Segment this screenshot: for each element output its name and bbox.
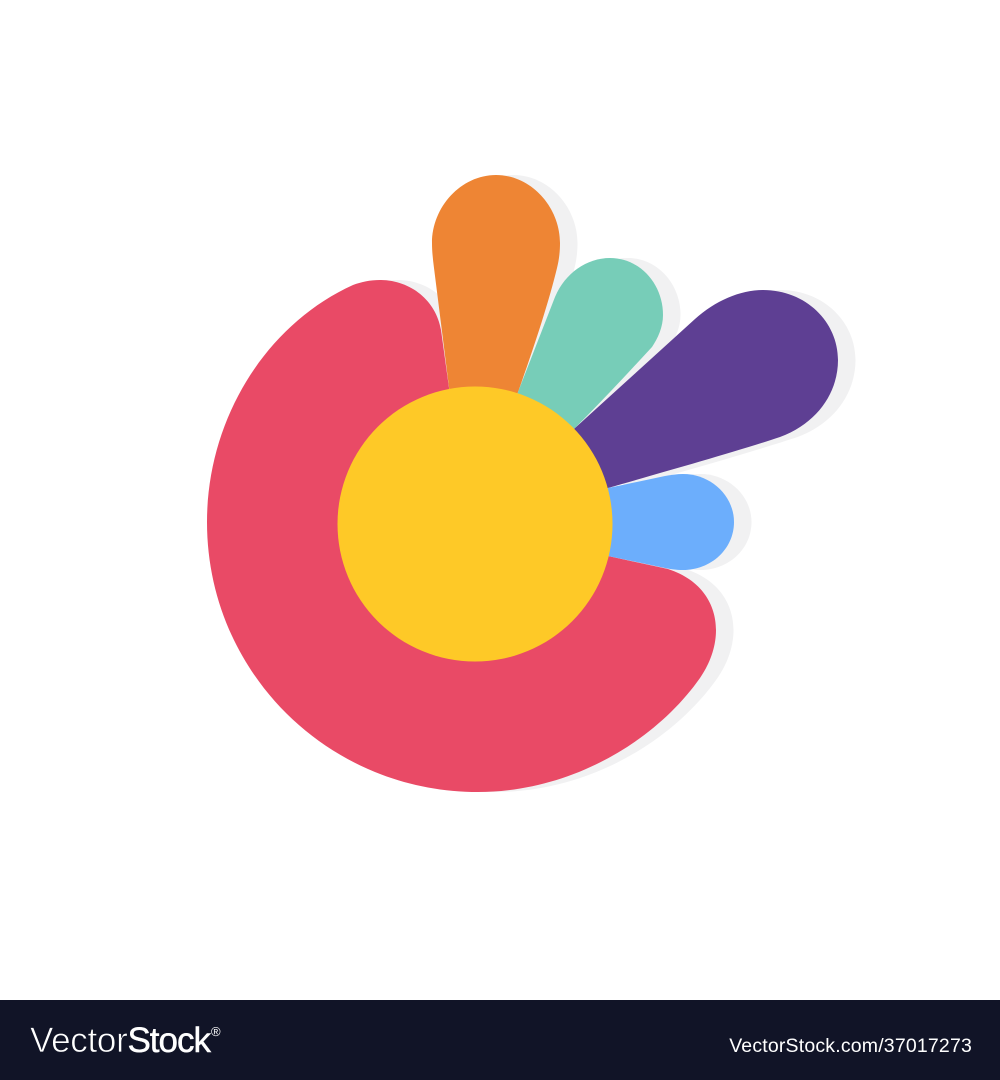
orange petal — [432, 175, 560, 395]
yellow center circle — [338, 386, 612, 662]
purple petal — [500, 290, 838, 500]
VectorStock logo: ® — [211, 1024, 221, 1039]
blue petal — [560, 474, 734, 570]
teal petal — [500, 258, 663, 480]
footer bar — [0, 1000, 1000, 1080]
red crescent petal — [207, 280, 716, 792]
VectorStock logo: VectorStock — [30, 1021, 210, 1060]
soft grey shadows behind petals — [224, 175, 856, 792]
image URL: VectorStock.com/37017273 — [729, 1035, 972, 1057]
